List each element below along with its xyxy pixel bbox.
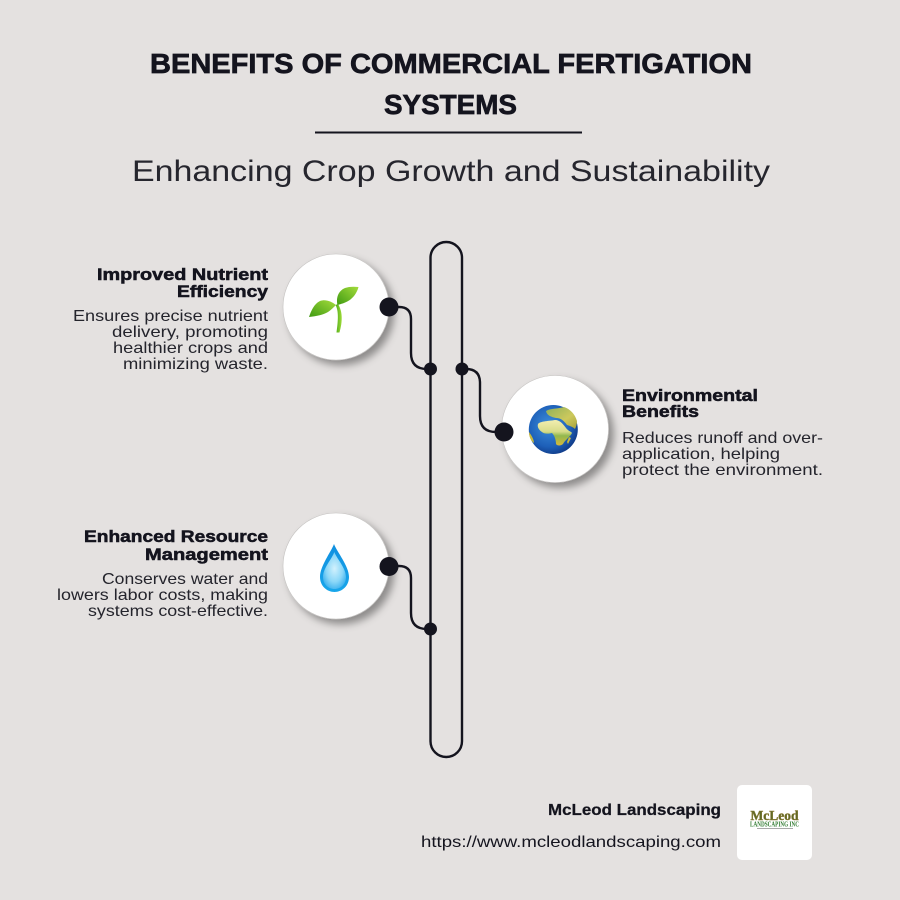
text: nutrient description: Ensures precise nutrient	[73, 308, 269, 325]
connector: environmental benefits	[456, 362, 496, 432]
panel: enhanced resource management	[57, 513, 398, 620]
text: resource description	[57, 571, 268, 620]
text: nutrient description: delivery, promoting	[112, 324, 268, 341]
text: environmental description	[622, 430, 823, 479]
panel: improved nutrient efficiency	[73, 254, 398, 373]
text: environmental description: Reduces runoff and over-	[622, 430, 823, 447]
text: environmental heading: Environmental	[622, 386, 758, 405]
text: environmental description: protect the environment.	[622, 462, 823, 479]
text: nutrient description	[73, 308, 269, 373]
logo: McLeod Landscaping: LANDSCAPING INC	[750, 820, 799, 828]
logo: McLeod Landscaping: McLeod	[750, 808, 799, 823]
text: environmental heading: Benefits	[622, 402, 699, 421]
text: nutrient description: minimizing waste.	[123, 356, 268, 373]
text: resource heading: Management	[145, 545, 268, 564]
text: environmental description: application, helping	[622, 446, 780, 463]
text: nutrient heading	[97, 265, 269, 301]
central timeline pill	[430, 242, 462, 757]
text: resource heading	[84, 527, 268, 564]
text: nutrient heading: Improved Nutrient	[97, 265, 268, 284]
title underline	[315, 132, 582, 134]
footer: company name: McLeod Landscaping	[548, 802, 721, 819]
title	[150, 48, 752, 120]
subtitle: Enhancing Crop Growth and Sustainability	[132, 155, 770, 188]
title: SYSTEMS	[384, 89, 517, 120]
text: resource description: lowers labor costs, making	[57, 587, 268, 604]
connector: resource management	[389, 566, 437, 636]
text: nutrient heading: Efficiency	[177, 282, 269, 301]
text: nutrient description: healthier crops and	[113, 340, 268, 357]
connector: nutrient efficiency	[389, 307, 437, 376]
logo: McLeod Landscaping	[737, 785, 812, 860]
footer: website url: https://www.mcleodlandscaping.com	[421, 834, 721, 851]
panel: environmental benefits	[494, 376, 823, 482]
title: BENEFITS OF COMMERCIAL FERTIGATION	[150, 48, 752, 79]
icon: water drop	[283, 513, 398, 619]
text: environmental heading	[622, 386, 758, 421]
text: resource description: Conserves water and	[102, 571, 268, 588]
text: resource heading: Enhanced Resource	[84, 527, 268, 546]
text: resource description: systems cost-effective.	[88, 603, 268, 620]
icon: sprout	[283, 254, 398, 360]
icon: globe	[494, 376, 608, 482]
